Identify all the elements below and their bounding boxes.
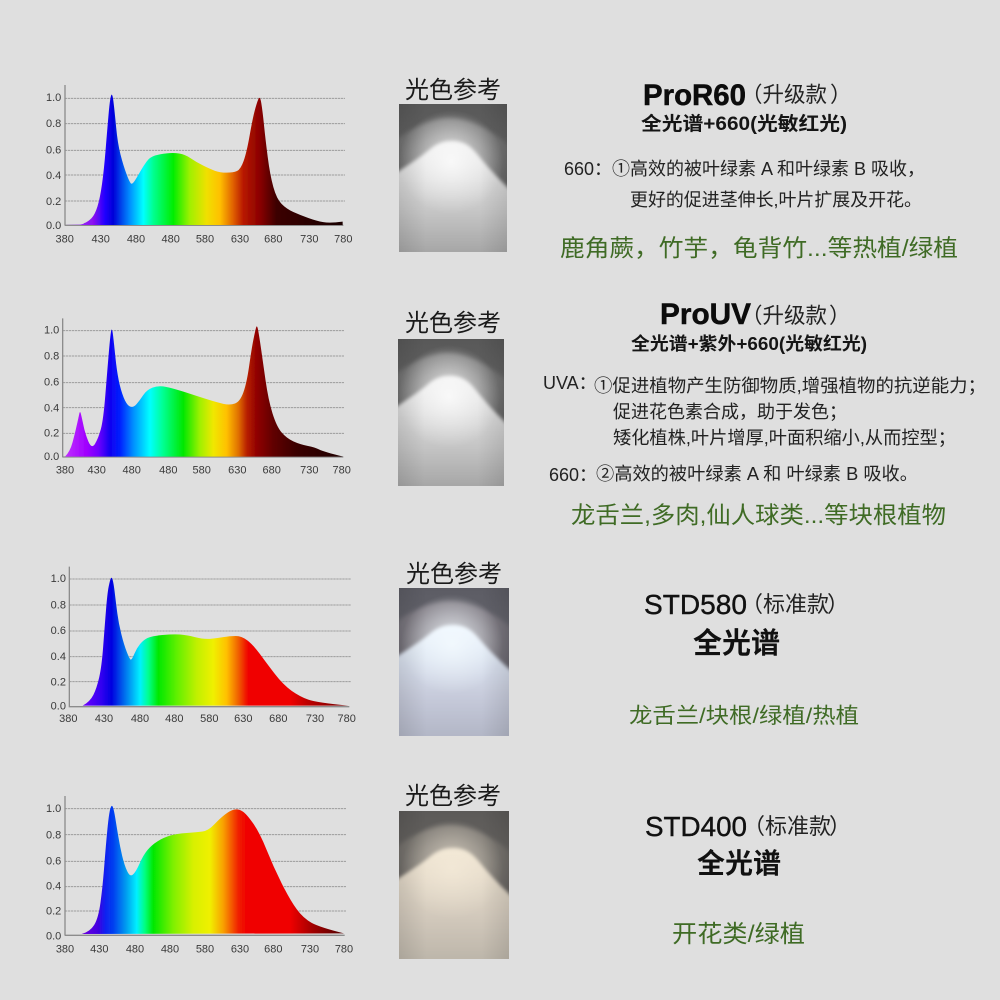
spectrum chart: STD400: 0.0: [46, 930, 61, 942]
heading: 光色参考: 光色参考: [405, 310, 501, 337]
spectrum chart: STD400: 0.8: [46, 830, 61, 842]
spectrum chart: STD400: 0.6: [46, 856, 61, 868]
text block: 660 description: [564, 159, 925, 210]
panel: STD400: [46, 783, 851, 971]
text block: 660 description: 更好的促进茎伸长,叶片扩展及开花。: [630, 190, 922, 210]
plants: suitable species: 开花类/绿植: [672, 921, 805, 948]
spectrum chart: ProUV: [44, 318, 351, 476]
spectrum chart: STD580: 0.4: [51, 651, 66, 663]
spectrum chart: STD400: 430: [90, 944, 108, 956]
spectrum chart: STD400: 580: [196, 944, 214, 956]
spectrum chart: STD580: 380: [59, 713, 77, 725]
spectrum chart: STD580: 580: [200, 713, 218, 725]
spectrum chart: ProR60: 0.6: [46, 145, 61, 157]
panel: ProR60: [46, 77, 958, 264]
spectrum chart: STD580: 0.8: [51, 600, 66, 612]
panel: STD580: [51, 561, 859, 748]
heading: 光色参考: 光色参考: [405, 77, 501, 104]
spectrum chart: ProR60: 0.8: [46, 118, 61, 130]
spectrum chart: STD580: 730: [306, 713, 324, 725]
text block: UVA description: ①促进植物产生防御物质,增强植物的抗逆能力；: [594, 376, 986, 396]
spectrum chart: ProR60: 480: [127, 233, 145, 245]
plants: suitable species: 龙舌兰,多肉,仙人球类...等块根植物: [571, 502, 946, 528]
spectrum chart: ProUV: 630: [228, 464, 246, 476]
spectrum chart: ProUV: 0.6: [44, 376, 59, 388]
text block: 660 description: 660：: [564, 159, 612, 179]
spectrum chart: ProUV: 580: [193, 464, 211, 476]
light photo: STD400: [399, 811, 509, 959]
spectrum chart: ProUV: 480: [123, 464, 141, 476]
plants: suitable species: 鹿角蕨，竹芋，龟背竹...等热植/绿植: [560, 235, 958, 261]
spectrum chart: STD400: 630: [231, 944, 249, 956]
spectrum chart: ProUV: 0.2: [44, 428, 59, 440]
text block: 660 description: 660：: [549, 465, 597, 485]
text block: UVA description: UVA：: [543, 373, 597, 393]
spectrum chart: STD580: 630: [234, 713, 252, 725]
subtitle: 标准款: （标准款）: [741, 592, 849, 617]
text block: 660 description: ①高效的被叶绿素 A 和叶绿素 B 吸收，: [612, 159, 925, 179]
spectrum chart: ProR60: 0.0: [46, 220, 61, 232]
spectrum chart: ProR60: 680: [264, 233, 282, 245]
spectrum chart: ProUV: 430: [88, 464, 106, 476]
spectrum chart: ProR60: 1.0: [46, 92, 61, 104]
spectrum chart: STD580: 1.0: [51, 573, 66, 585]
light photo: STD580: [399, 588, 509, 736]
spectrum chart: ProUV: 780: [332, 464, 351, 476]
heading: 光色参考: 光色参考: [405, 783, 501, 810]
spectrum chart: STD580: 780: [337, 713, 356, 725]
spectrum chart: STD580: 430: [95, 713, 113, 725]
spectrum chart: STD400: 380: [56, 944, 74, 956]
light photo: ProR60: [399, 104, 507, 252]
spectrum chart: ProR60: 0.4: [46, 170, 61, 182]
text block: UVA description: 促进花色素合成，助于发色；: [613, 402, 847, 422]
spectrum chart: ProR60: [46, 85, 352, 245]
spectrum chart: ProR60: 380: [56, 233, 74, 245]
spectrum chart: STD400: 730: [301, 944, 319, 956]
spectrum chart: ProUV: 0.8: [44, 350, 59, 362]
spectrum chart: STD400: 1.0: [46, 803, 61, 815]
spectrum chart: ProUV: 1.0: [44, 324, 59, 336]
subtitle: spectrum type: 全光谱: [693, 627, 780, 660]
plants: suitable species: 龙舌兰/块根/绿植/热植: [629, 704, 859, 728]
subtitle: 升级款: （升级款）: [741, 83, 852, 107]
spectrum chart: STD580: 680: [269, 713, 287, 725]
spectrum chart: STD580: 0.2: [51, 676, 66, 688]
spectrum chart: STD580: 480: [165, 713, 183, 725]
spectrum chart: STD400: 480: [126, 944, 144, 956]
text block: UVA description: [543, 373, 986, 448]
spectrum chart: STD580: [51, 567, 356, 725]
title: ProR60: ProR60: [643, 79, 746, 112]
subtitle: 标准款: （标准款）: [743, 814, 851, 839]
spectrum chart: ProUV: 480: [159, 464, 177, 476]
spectrum chart: STD580: 480: [131, 713, 149, 725]
spectrum chart: ProR60: 630: [231, 233, 249, 245]
spectrum chart: STD400: [46, 796, 353, 956]
spectrum chart: ProUV: 0.0: [44, 451, 59, 463]
subtitle: spectrum type: 全光谱: [697, 848, 781, 879]
light photo: ProUV: [398, 339, 504, 486]
spectrum chart: STD580: 0.0: [51, 700, 66, 712]
spectrum chart: ProUV: 0.4: [44, 402, 59, 414]
panel: ProUV: [44, 298, 986, 528]
title: STD400: STD400: [645, 811, 747, 842]
subtitle: spectrum type: 全光谱+660(光敏红光): [641, 112, 847, 135]
subtitle: 升级款: （升级款）: [741, 304, 851, 328]
spectrum chart: ProR60: 0.2: [46, 196, 61, 208]
spectrum chart: STD400: 780: [335, 944, 353, 956]
spectrum chart: ProR60: 580: [196, 233, 214, 245]
spectrum chart: ProUV: 380: [56, 464, 74, 476]
spectrum chart: ProUV: 730: [300, 464, 318, 476]
title: ProUV: ProUV: [660, 298, 751, 331]
spectrum chart: ProR60: 430: [92, 233, 110, 245]
spectrum chart: ProR60: 480: [162, 233, 180, 245]
spectrum chart: STD400: 680: [264, 944, 282, 956]
spectrum chart: STD400: 480: [161, 944, 179, 956]
spectrum chart: STD580: 0.6: [51, 625, 66, 637]
text block: 660 description: ②高效的被叶绿素 A 和 叶绿素 B 吸收。: [596, 464, 918, 484]
subtitle: spectrum type: 全光谱+紫外+660(光敏红光): [631, 333, 867, 354]
text block: UVA description: 矮化植株,叶片增厚,叶面积缩小,从而控型；: [613, 428, 956, 448]
spectrum chart: STD400: 0.2: [46, 906, 61, 918]
spectrum chart: STD400: 0.4: [46, 880, 61, 892]
heading: 光色参考: 光色参考: [406, 561, 502, 588]
spectrum chart: ProR60: 730: [300, 233, 318, 245]
spectrum chart: ProUV: 680: [263, 464, 281, 476]
spectrum chart: ProR60: 780: [334, 233, 352, 245]
title: STD580: STD580: [644, 589, 747, 620]
